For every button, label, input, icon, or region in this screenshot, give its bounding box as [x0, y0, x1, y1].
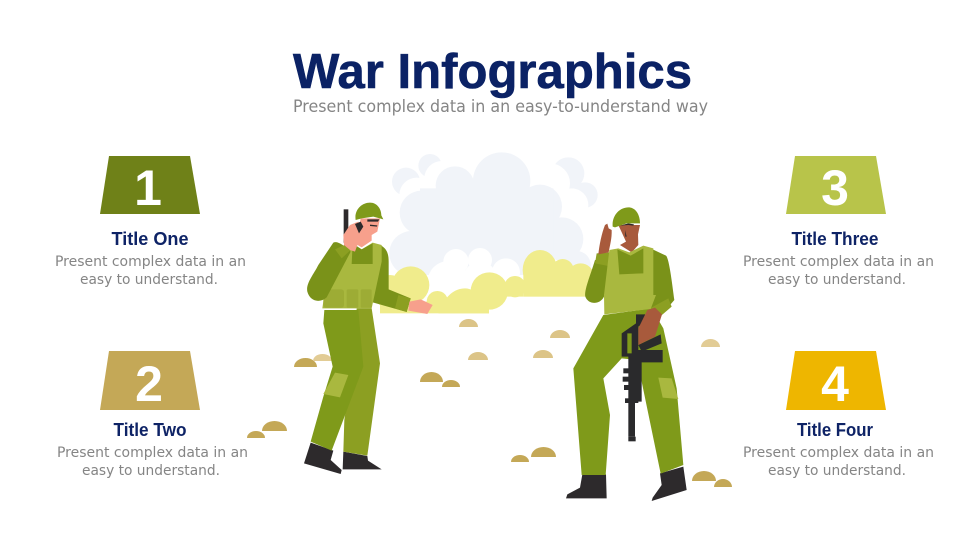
description 2: Present complex data in an [57, 445, 248, 461]
badge 1 [100, 156, 200, 214]
boots [566, 467, 687, 501]
number 4: 4 [821, 356, 849, 412]
rifle [622, 314, 663, 441]
boots [304, 443, 382, 474]
heading: Title One: Title One [112, 229, 188, 249]
trousers [311, 308, 380, 456]
trousers [573, 308, 683, 475]
head and helmet [352, 203, 383, 247]
soldier with rifle [566, 207, 687, 501]
panel: step 4 [743, 351, 934, 479]
vest collar panel [352, 243, 373, 264]
heading: Title Four: Title Four [797, 420, 873, 440]
vest [322, 243, 382, 308]
right arm and hand [370, 245, 433, 314]
panel: step 1 [55, 156, 246, 288]
badge 2 [100, 351, 200, 410]
smoke cloud [389, 152, 598, 302]
description 2 [57, 445, 248, 479]
vest collar panel [617, 248, 643, 274]
heading: Title Three: Title Three [792, 229, 878, 249]
left arm with raised hand [585, 224, 612, 303]
panel: step 2 [57, 351, 248, 479]
description 1: easy to understand. [80, 272, 218, 288]
description 3 [743, 254, 934, 288]
bushes [373, 250, 595, 313]
badge 4 [786, 351, 886, 410]
ground mounds [247, 319, 732, 487]
gripping hand [638, 308, 662, 345]
description 1: Present complex data in an [55, 254, 246, 270]
soldier on the radio [304, 203, 433, 474]
vest pouches [323, 289, 372, 308]
radio antenna [344, 209, 348, 243]
description 3: easy to understand. [768, 272, 906, 288]
illustration: smoke cloud and bushes [373, 152, 598, 313]
subtitle: Present complex data in an easy-to-understand way [293, 97, 708, 117]
number 3: 3 [821, 160, 849, 216]
head and helmet [613, 207, 640, 252]
description 4: Present complex data in an [743, 445, 934, 461]
description 4 [743, 445, 934, 479]
left arm raised to radio [307, 222, 363, 301]
title: War Infographics [293, 45, 692, 99]
heading: Title Two: Title Two [114, 420, 186, 440]
description 4: easy to understand. [768, 463, 906, 479]
panel: step 3 [743, 156, 934, 288]
description 2: easy to understand. [82, 463, 220, 479]
description 3: Present complex data in an [743, 254, 934, 270]
right arm [650, 249, 674, 317]
vest [604, 246, 656, 314]
number 1: 1 [134, 160, 162, 216]
badge 3 [786, 156, 886, 214]
description 1 [55, 254, 246, 288]
number 2: 2 [135, 356, 163, 412]
